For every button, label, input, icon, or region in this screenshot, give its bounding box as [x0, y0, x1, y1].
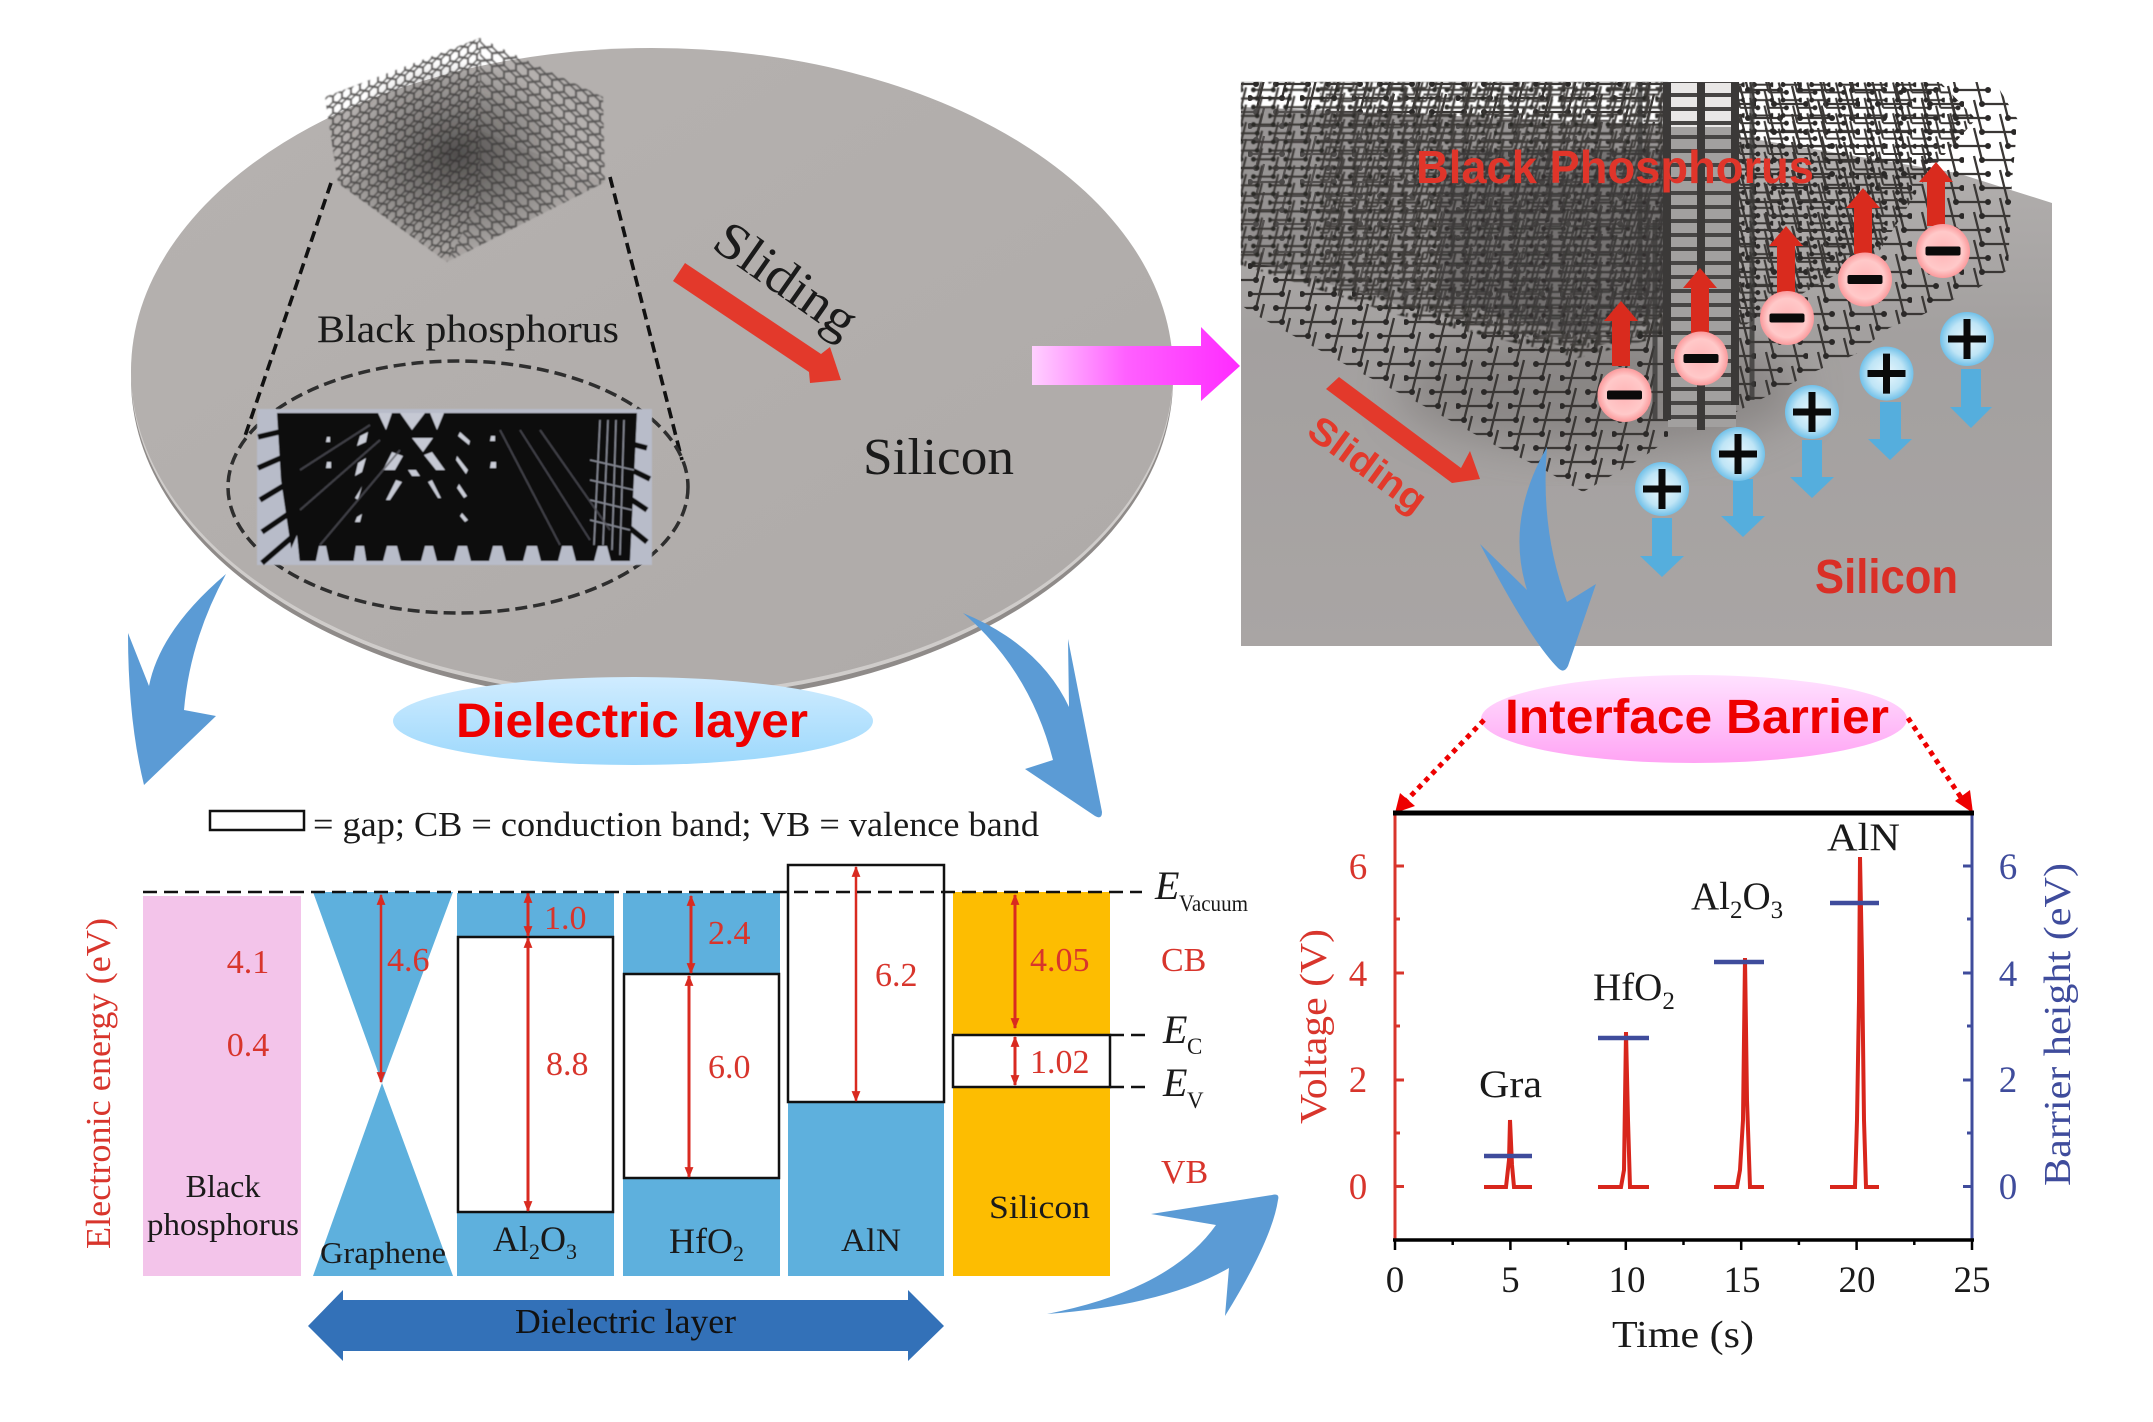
label: black phosphorus: Black phosphorus [317, 308, 619, 351]
zoom cone dashed lines [244, 177, 682, 460]
right tick labels: 0 [1999, 1167, 2017, 1208]
vacuum level dashed line [143, 891, 1142, 893]
peak labels: O [1742, 875, 1771, 918]
x tick labels: 10 [1608, 1260, 1646, 1301]
panel: silicon wafer with black phosphorus [131, 38, 1173, 703]
energy level labels: CB [1161, 942, 1206, 979]
band: HfO2: 2.4 [708, 915, 750, 952]
left tick labels [1349, 847, 1367, 1208]
label: sliding: Sliding [703, 210, 869, 350]
lattice shadow [1400, 330, 1800, 450]
arrow: blue lower-left from wafer [128, 574, 226, 785]
band: graphene: 4.6 [387, 942, 430, 979]
lattice: sparse right wing [1736, 82, 2018, 412]
label: silicon: Silicon [863, 429, 1014, 486]
black phosphorus side-view lattice [257, 409, 652, 565]
label: black phosphorus: Black Phosphorus [1416, 141, 1814, 193]
peak labels: HfO [1593, 966, 1662, 1009]
peak labels: AlN [1827, 816, 1900, 859]
label: sliding: Sliding [1300, 408, 1434, 522]
panel: close-up of charges at interface [1241, 82, 2052, 646]
x tick labels: 15 [1724, 1260, 1760, 1301]
peak labels: 2 [1662, 988, 1675, 1015]
axis label: electronic energy: Electronic energy (eV) [79, 918, 118, 1249]
callout: dielectric layer [393, 677, 873, 765]
x tick labels [1386, 1260, 1990, 1301]
right tick labels [1999, 847, 2017, 1208]
positive charges with down arrows [1635, 312, 1994, 577]
band: Al2O3: O [540, 1219, 566, 1259]
band: graphene: Graphene [320, 1235, 446, 1270]
lattice: sparse lower layer left [1241, 82, 1668, 492]
right tick labels: 6 [1999, 847, 2017, 888]
peak labels: Gra [1479, 1063, 1542, 1106]
left tick labels: 6 [1349, 847, 1367, 888]
energy level labels: Vacuum [1179, 891, 1248, 916]
arrow: sliding [1326, 377, 1480, 483]
band: black phosphorus [143, 896, 301, 1276]
peak labels: 3 [1771, 897, 1783, 924]
barrier height bars [1484, 903, 1879, 1156]
black phosphorus lattice block [325, 38, 605, 262]
left tick labels: 4 [1349, 954, 1367, 995]
x tick labels: 5 [1501, 1260, 1520, 1301]
band: AlN: AlN [841, 1223, 901, 1259]
right tick labels: 2 [1999, 1060, 2017, 1101]
lattice: central ladder channel [1640, 82, 1752, 430]
band: Al2O3: 8.8 [546, 1046, 588, 1083]
band: black phosphorus: 0.4 [227, 1027, 269, 1064]
band: Al2O3 [457, 893, 614, 1276]
dotted arrows to chart [1395, 718, 1973, 813]
energy level labels: VB [1161, 1154, 1208, 1191]
lattice: dense upper layer left [1241, 82, 1668, 358]
axis title: barrier height: Barrier height (eV) [2037, 863, 2079, 1186]
energy level labels: E [1162, 1060, 1187, 1105]
dielectric layer double arrow [308, 1290, 944, 1361]
peak labels: 2 [1730, 897, 1742, 924]
panel: band diagram [79, 805, 1248, 1361]
axis title: voltage: Voltage (V) [1293, 929, 1335, 1124]
left tick labels: 2 [1349, 1060, 1367, 1101]
callout: interface barrier: Interface Barrier [1505, 691, 1889, 744]
energy level labels: E [1154, 863, 1179, 908]
band: Al2O3: 3 [566, 1239, 577, 1264]
energy level labels: E [1162, 1007, 1187, 1052]
white top area [1241, 82, 2052, 203]
band: Al2O3: Al [493, 1219, 529, 1259]
energy level labels: V [1187, 1088, 1204, 1113]
band: Al2O3: 2 [529, 1239, 540, 1264]
lattice: dense right wing [1736, 82, 1976, 330]
arrow: magenta to close-up [1032, 327, 1240, 401]
callout: dielectric layer: Dielectric layer [456, 695, 808, 748]
photo background [1241, 82, 2052, 646]
right tick labels: 4 [1999, 954, 2017, 995]
arrow: blue lower-right from wafer [963, 613, 1102, 817]
arrow: sliding direction [673, 263, 841, 383]
band: AlN [788, 865, 944, 1276]
band: AlN: 6.2 [875, 957, 918, 994]
x tick labels: 25 [1954, 1260, 1990, 1301]
energy level labels [1110, 863, 1248, 1191]
band: Al2O3: 1.0 [544, 900, 586, 937]
chart: voltage and barrier height vs time [1293, 813, 2079, 1356]
band: silicon [953, 892, 1110, 1276]
dashed zoom ellipse [228, 361, 688, 613]
dielectric layer double arrow: Dielectric layer [515, 1302, 736, 1341]
arrow: blue down from close-up [1480, 447, 1596, 671]
peak labels: Al [1691, 875, 1730, 918]
negative charges with up arrows [1598, 162, 1970, 422]
band: black phosphorus: Black [186, 1168, 260, 1204]
label: silicon: Silicon [1815, 551, 1958, 604]
silicon wafer disc [131, 48, 1173, 703]
band: silicon: Silicon [989, 1190, 1090, 1226]
band: HfO2 [623, 893, 780, 1276]
band: graphene [313, 892, 453, 1276]
arrow: blue to chart [1047, 1195, 1278, 1316]
x tick labels: 0 [1386, 1260, 1404, 1301]
band: black phosphorus: 4.1 [227, 944, 269, 981]
band: black phosphorus: phosphorus [147, 1206, 299, 1242]
callout: interface barrier [1481, 675, 1907, 763]
voltage peaks [1484, 857, 1879, 1187]
band: silicon: 4.05 [1030, 942, 1090, 979]
legend: = gap; CB = conduction band; VB = valence band [313, 805, 1040, 844]
left tick labels: 0 [1349, 1167, 1367, 1208]
axes [1393, 813, 1974, 1250]
peak labels [1479, 816, 1900, 1106]
energy level labels: C [1187, 1034, 1202, 1059]
band: silicon: 1.02 [1030, 1044, 1090, 1081]
band: HfO2: HfO [669, 1221, 733, 1261]
x tick labels: 20 [1838, 1260, 1876, 1301]
band: HfO2: 6.0 [708, 1049, 750, 1086]
band: HfO2: 2 [733, 1241, 744, 1266]
axis title: time: Time (s) [1612, 1314, 1754, 1356]
